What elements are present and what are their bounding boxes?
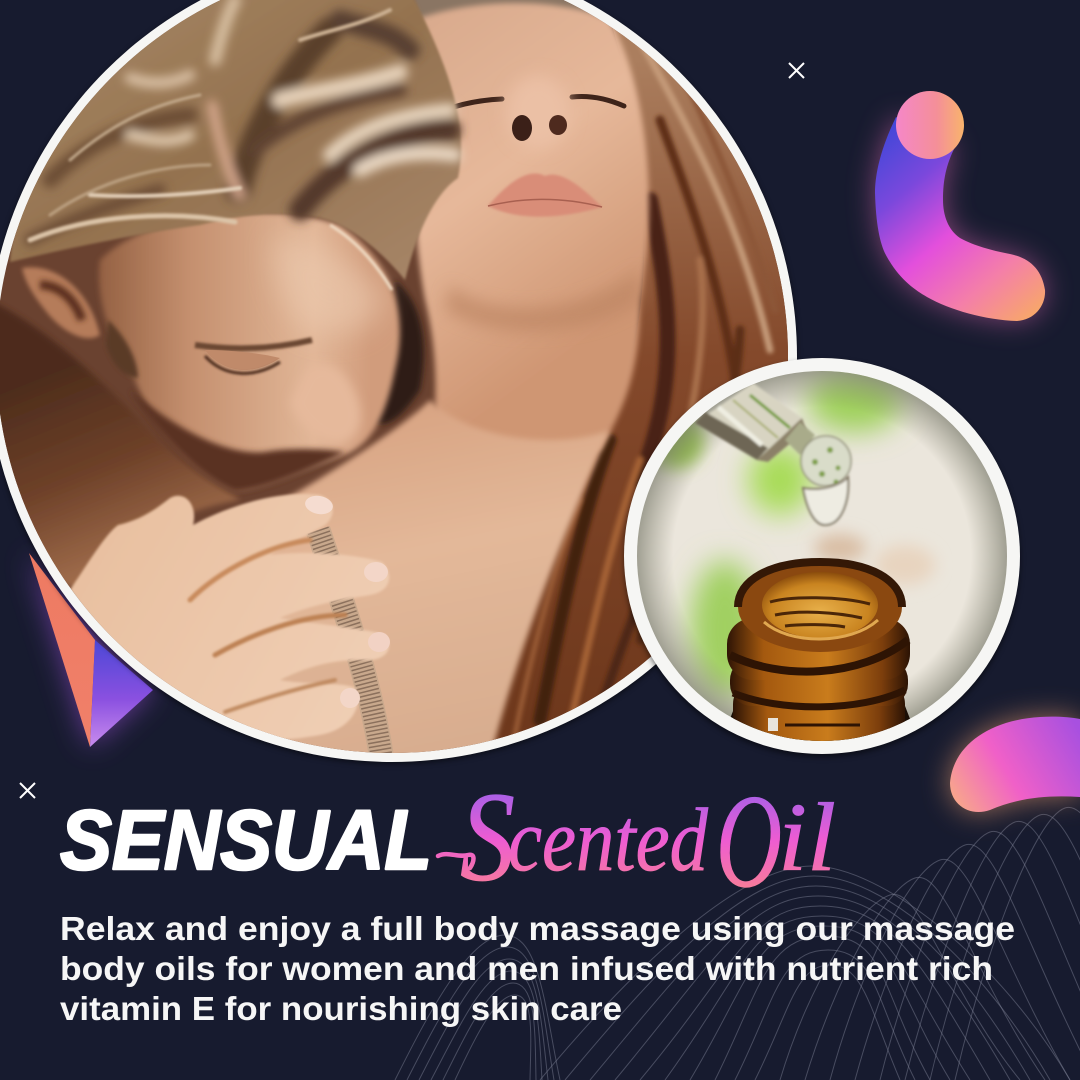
heading: [60, 766, 836, 915]
blush spots: [814, 534, 866, 562]
man's stubble and mouth: [130, 390, 345, 492]
dropper bulb: [785, 422, 851, 486]
wave mesh background: [395, 807, 1080, 1080]
man's nose: [324, 369, 363, 443]
photo: dropper and amber bottle in small circle: [624, 358, 1020, 757]
woman's nose: [506, 76, 570, 148]
vignette: [636, 370, 1008, 742]
man's blond hair: [10, 0, 461, 280]
script flourish: [438, 854, 474, 868]
oil drop: [803, 477, 848, 525]
man's brow and eye: [195, 340, 312, 348]
heading: Scented Oil: il: [778, 784, 836, 892]
woman's lips: [488, 174, 602, 217]
man's sideburn: [106, 320, 138, 378]
photo: couple in large circle: [0, 0, 800, 770]
hook shape: [875, 91, 1045, 321]
body text: [60, 910, 1015, 1027]
chest: [240, 400, 610, 760]
triangle shape: [29, 553, 153, 747]
man's face: [99, 212, 400, 490]
long red hair: [492, 28, 788, 740]
closed eyes: [454, 96, 504, 109]
amber bottle: [727, 558, 910, 741]
man's neck shadow: [0, 300, 240, 590]
x mark left: [20, 783, 35, 798]
dark gap behind man: [370, 280, 424, 424]
heading: Scented Oil: S: [460, 766, 515, 908]
bra strap: [318, 530, 382, 760]
heading: Scented Oil: cented: [508, 791, 709, 890]
man's ear: [22, 267, 100, 338]
body text: body oils for women and men infused with nutrient rich: [60, 950, 993, 987]
heading: SENSUAL: SENSUAL: [60, 793, 432, 887]
hand and fingers: [70, 494, 390, 739]
dropper tube: [695, 383, 806, 462]
body text: vitamin E for nourishing skin care: [60, 990, 622, 1027]
heading: Scented Oil: O: [716, 767, 782, 915]
body text: Relax and enjoy a full body massage using our massage: [60, 910, 1015, 947]
bean shape: [950, 717, 1080, 812]
x mark top: [789, 63, 804, 78]
woman's face and neck: [412, 3, 649, 450]
green foliage: [807, 368, 903, 432]
top hair on woman's forehead: [414, 0, 595, 19]
